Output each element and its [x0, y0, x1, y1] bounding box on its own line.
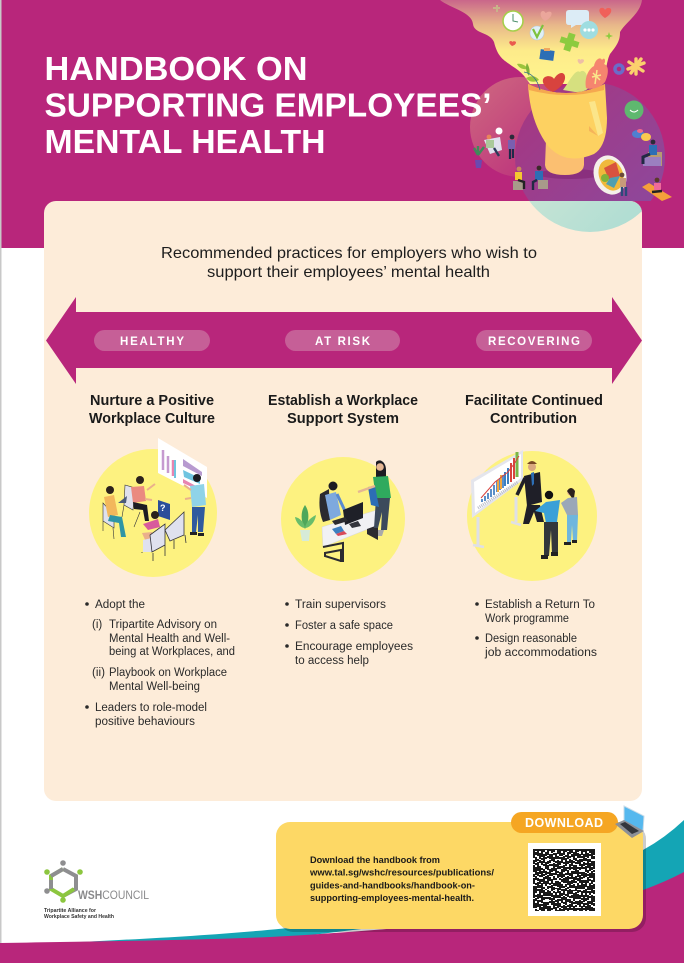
illustration: team meeting [89, 438, 217, 577]
icon: check [530, 25, 544, 40]
pill: recovering: RECOVERING [488, 336, 580, 348]
bullets: facilitate: Establish a Return To [485, 599, 595, 611]
icon: small hearts and stars [493, 5, 613, 64]
download card [276, 806, 646, 932]
download text: Download the handbook from [310, 855, 440, 866]
pill: healthy: HEALTHY [120, 336, 184, 348]
QR code [528, 843, 601, 916]
heading: nurture: Workplace Culture [89, 411, 215, 427]
puzzle wheel and person [588, 151, 632, 199]
title: HANDBOOK ON [44, 51, 308, 88]
bottom wave [0, 820, 684, 963]
bullets: establish [285, 599, 413, 667]
pill: recovering [476, 330, 592, 351]
heading: facilitate: Contribution [490, 411, 577, 427]
download text [309, 855, 494, 904]
bullets: establish: to access help [295, 655, 369, 667]
illustration: workplace support [281, 457, 405, 581]
logo: WSH Council: WSHCOUNCIL [78, 888, 149, 902]
illustration: team meeting: ? [160, 503, 166, 513]
download text: supporting-employees-mental-health. [310, 893, 474, 904]
icon: flower [628, 59, 644, 74]
intro text: Recommended practices for employers who wish to [161, 245, 537, 262]
download text: www.tal.sg/wshc/resources/publications/ [309, 868, 494, 878]
double-headed arrow [46, 297, 642, 384]
bullets: nurture [85, 599, 235, 728]
mug [528, 84, 607, 179]
icon: clock [503, 11, 523, 31]
title: MENTAL HEALTH [44, 124, 326, 161]
bullets: establish: Train supervisors [295, 599, 386, 611]
bullets: establish: Encourage employees [295, 641, 413, 653]
bullets: nurture: being at Workplaces, and [109, 646, 235, 658]
people: seated group left [474, 128, 548, 190]
icon: speech bubbles [566, 10, 598, 39]
bullets: nurture: Mental Health and Well- [109, 633, 230, 645]
download pill: DOWNLOAD [525, 816, 603, 830]
intro text: support their employees’ mental health [207, 264, 490, 281]
header band [0, 0, 684, 248]
bullets: nurture: Leaders to role-model [95, 702, 207, 714]
people: yoga on mat [642, 178, 672, 201]
plants and heart in mug [517, 58, 608, 92]
icon: green cross [558, 31, 581, 54]
icon: gear [615, 65, 623, 73]
download text: guides-and-handbooks/handbook-on- [310, 880, 475, 892]
bullets: nurture: positive behaviours [95, 716, 195, 728]
heading: nurture [89, 393, 215, 427]
bullets: facilitate: Work programme [485, 613, 569, 625]
hero illustration backdrop [440, 0, 665, 201]
icon: laptop [615, 806, 644, 838]
download pill [511, 812, 618, 833]
bullets: establish: Foster a safe space [295, 620, 393, 632]
people: reading on bench [643, 140, 662, 166]
hero illustration [474, 5, 672, 201]
icon: green smiley [624, 100, 644, 120]
bullets: nurture: Mental Well-being [109, 681, 200, 693]
logo: WSH Council [44, 860, 149, 920]
bullets: nurture: Tripartite Advisory on [109, 619, 217, 631]
bullets: facilitate [475, 599, 597, 659]
heading: establish: Support System [287, 411, 399, 427]
title: SUPPORTING EMPLOYEES’ [44, 88, 492, 124]
icon: colour blob [632, 129, 651, 141]
heading: nurture: Nurture a Positive [90, 393, 214, 409]
title [44, 51, 492, 161]
pill: healthy [94, 330, 210, 351]
illustration: return to work [467, 450, 597, 581]
pill: at risk: AT RISK [315, 336, 371, 348]
heading: facilitate [465, 393, 603, 427]
teal circle over panel [529, 201, 642, 232]
bullets: nurture: (i) [92, 619, 102, 631]
bullets: nurture: Adopt the [95, 599, 145, 611]
panel: recommended practices [44, 201, 642, 801]
bullets: nurture: Playbook on Workplace [109, 667, 227, 679]
logo: WSH Council: Workplace Safety and Health [44, 914, 114, 920]
bullets: nurture: (ii) [92, 667, 105, 679]
heading: establish [268, 393, 418, 427]
bullets: facilitate: job accommodations [484, 647, 597, 659]
heading: facilitate: Facilitate Continued [465, 393, 603, 409]
pill: at risk [285, 330, 400, 351]
heading: establish: Establish a Workplace [268, 393, 418, 409]
intro text [161, 245, 537, 281]
logo: WSH Council: Tripartite Alliance for [44, 908, 96, 914]
icon: briefcase [539, 48, 555, 61]
bullets: facilitate: Design reasonable [485, 633, 577, 645]
